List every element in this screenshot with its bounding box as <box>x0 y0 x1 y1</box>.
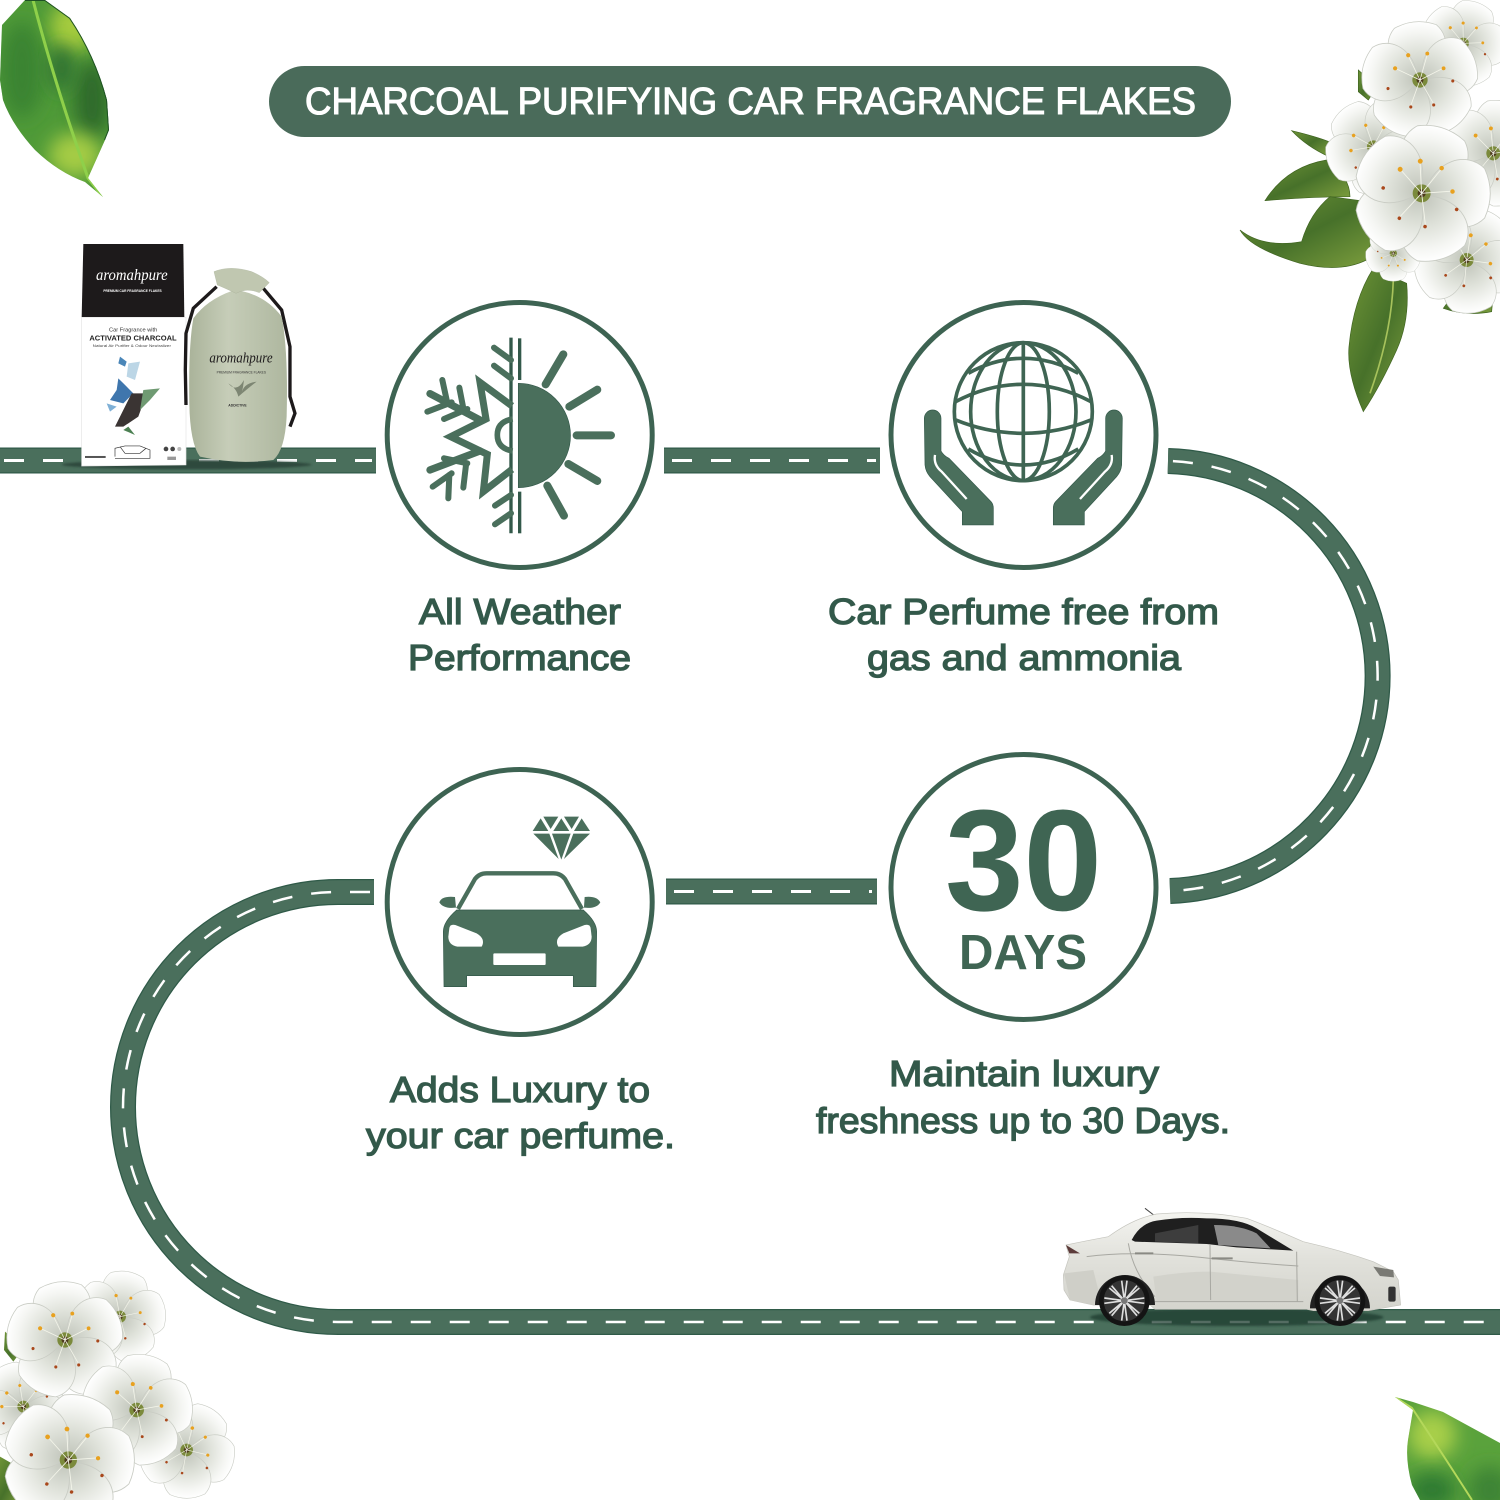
road: top left segment <box>0 448 376 474</box>
icon: snowflake and sun <box>427 338 611 533</box>
road: right curve <box>1168 461 1378 891</box>
product: charcoal box and jute bag <box>62 244 312 469</box>
caption: freshness: Maintain luxury <box>889 1053 1159 1094</box>
flowers bottom left <box>0 1263 258 1500</box>
box artwork <box>107 357 160 435</box>
leaf top left <box>0 0 109 197</box>
word days: DAYS <box>959 926 1087 980</box>
caption: freshness: freshness up to 30 Days. <box>816 1100 1230 1141</box>
circle: luxury car <box>387 770 652 1034</box>
road: connector between circles, bottom <box>666 878 877 904</box>
product shadow <box>62 460 312 469</box>
bag: ADDICTIVE <box>228 403 247 407</box>
caption: all weather: All Weather <box>419 591 621 632</box>
circle: 30 days <box>891 754 1156 1020</box>
caption: gas free <box>828 591 1219 678</box>
road: left curve and bottom straight <box>123 892 1500 1322</box>
car door lines <box>1087 1243 1303 1302</box>
bag <box>185 268 295 462</box>
diamond <box>533 817 590 860</box>
car wheels <box>1099 1275 1150 1326</box>
caption: freshness <box>816 1053 1230 1141</box>
caption: all weather: Performance <box>408 637 631 678</box>
caption: gas free: Car Perfume free from <box>828 591 1219 632</box>
product: charcoal box and jute bag: aromahpure <box>96 267 168 284</box>
caption: gas free: gas and ammonia <box>867 637 1182 678</box>
title text: CHARCOAL PURIFYING CAR FRAGRANCE FLAKES <box>305 81 1196 123</box>
leaf bottom right <box>1395 1397 1500 1500</box>
road: connector between circles, top <box>664 448 880 474</box>
circle: globe in hands <box>891 302 1156 568</box>
car wheel arches <box>1095 1275 1155 1305</box>
car shadow <box>1090 1309 1383 1326</box>
title pill <box>269 66 1231 137</box>
icon: car and diamond <box>439 817 600 987</box>
bag: PREMIUM FRAGRANCE FLAKES <box>217 371 267 375</box>
white sedan car <box>1063 1208 1401 1326</box>
bag: aromahpure <box>209 351 273 367</box>
box black top <box>82 244 184 317</box>
box car outline <box>115 446 150 458</box>
product: charcoal box and jute bag: ACTIVATED CHARCOAL <box>89 334 177 343</box>
flowers top right <box>1240 0 1500 412</box>
car lower panel shading <box>1153 1272 1298 1302</box>
icon: globe held by hands <box>924 343 1122 525</box>
number 30: 30 <box>945 780 1102 941</box>
box white front <box>82 317 186 466</box>
product: charcoal box and jute bag: Natural Air Purifier & Odour Neutralizer <box>93 343 172 348</box>
car windows <box>1132 1218 1293 1251</box>
caption: all weather <box>408 591 631 678</box>
caption: luxury <box>366 1069 675 1156</box>
product: charcoal box and jute bag: PREMIUM CAR FRAGRANCE FLAKES <box>103 289 162 293</box>
leaves of top right spray <box>1240 70 1493 412</box>
circle: all weather <box>387 302 652 568</box>
caption: luxury: Adds Luxury to <box>390 1069 650 1110</box>
caption: luxury: your car perfume. <box>366 1115 675 1156</box>
product: charcoal box and jute bag: Car Fragrance with <box>109 327 157 333</box>
